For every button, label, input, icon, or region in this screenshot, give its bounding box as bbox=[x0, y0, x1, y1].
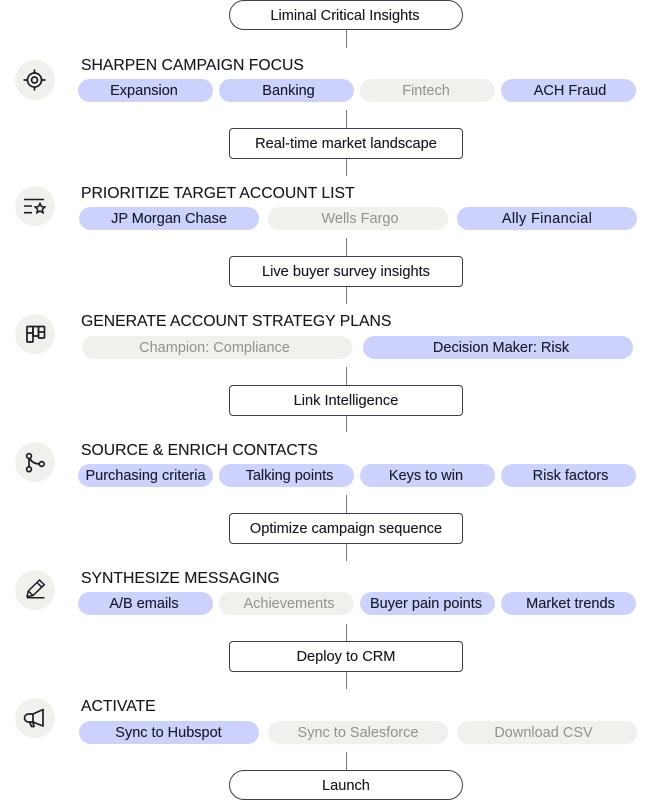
step: Deploy to CRM: Deploy to CRM bbox=[297, 649, 395, 665]
step: Live buyer survey insights bbox=[229, 256, 463, 287]
pill: Decision Maker: Risk: Decision Maker: Risk bbox=[433, 340, 569, 356]
pill: Expansion bbox=[78, 79, 213, 102]
heading: Generate Account Strategy Plans: GENERATE ACCOUNT STRATEGY PLANS bbox=[81, 313, 391, 330]
pill: Keys to win: Keys to win bbox=[389, 468, 463, 484]
pill: Risk factors: Risk factors bbox=[533, 468, 608, 484]
icon: pencil bbox=[15, 570, 55, 610]
pill: ACH Fraud: ACH Fraud bbox=[534, 83, 606, 99]
pill: Keys to win bbox=[360, 464, 495, 487]
pill: Fintech: Fintech bbox=[402, 83, 450, 99]
pill: Buyer pain points bbox=[360, 592, 495, 615]
end node: Launch bbox=[229, 770, 463, 800]
pill: Ally Financial: Ally Financial bbox=[502, 211, 592, 227]
pill: Purchasing criteria bbox=[78, 464, 213, 487]
pill: JP Morgan Chase bbox=[79, 207, 259, 230]
pill: Sync to Hubspot: Sync to Hubspot bbox=[115, 725, 222, 741]
pill: Download CSV: Download CSV bbox=[494, 725, 593, 741]
start node: Liminal Critical Insights bbox=[229, 0, 463, 30]
pill: JP Morgan Chase: JP Morgan Chase bbox=[111, 211, 227, 227]
pill: Market trends: Market trends bbox=[526, 596, 615, 612]
pill: Sync to Hubspot bbox=[79, 721, 259, 744]
icon: megaphone bbox=[15, 698, 55, 738]
heading: Synthesize Messaging: SYNTHESIZE MESSAGING bbox=[81, 570, 280, 587]
icon: branching nodes bbox=[15, 442, 55, 482]
pill: Achievements bbox=[219, 592, 354, 615]
step: Real-time market landscape bbox=[229, 128, 463, 159]
pill: Banking bbox=[219, 79, 354, 102]
step: Live buyer survey insights: Live buyer survey insights bbox=[262, 264, 430, 280]
heading: Prioritize Target Account List: PRIORITIZE TARGET ACCOUNT LIST bbox=[81, 185, 355, 202]
heading: Sharpen Campaign Focus: SHARPEN CAMPAIGN FOCUS bbox=[81, 57, 304, 74]
pill: Decision Maker: Risk bbox=[363, 336, 633, 359]
heading: Activate: ACTIVATE bbox=[81, 698, 156, 715]
step: Link Intelligence bbox=[229, 385, 463, 416]
pill: Banking: Banking bbox=[262, 83, 315, 99]
pill: Champion: Compliance: Champion: Compliance bbox=[139, 340, 290, 356]
pill: Wells Fargo bbox=[268, 207, 448, 230]
pill: Purchasing criteria: Purchasing criteria bbox=[85, 468, 206, 484]
step: Deploy to CRM bbox=[229, 641, 463, 672]
pill: ACH Fraud bbox=[501, 79, 636, 102]
icon: target bbox=[15, 60, 55, 100]
icon: board layout bbox=[15, 314, 55, 354]
pill: Download CSV bbox=[457, 721, 637, 744]
end node: Launch: Launch bbox=[322, 778, 370, 794]
pill: A/B emails: A/B emails bbox=[109, 596, 179, 612]
start node: Liminal Critical Insights: Liminal Critical Insights bbox=[270, 8, 420, 24]
heading: Source & Enrich Contacts: SOURCE & ENRICH CONTACTS bbox=[81, 442, 318, 459]
pill: Expansion: Expansion bbox=[110, 83, 178, 99]
pill: Sync to Salesforce bbox=[268, 721, 448, 744]
pill: Ally Financial bbox=[457, 207, 637, 230]
pill: Risk factors bbox=[501, 464, 636, 487]
pill: Wells Fargo: Wells Fargo bbox=[321, 211, 399, 227]
step: Link Intelligence: Link Intelligence bbox=[294, 393, 398, 409]
pill: Market trends bbox=[501, 592, 636, 615]
pill: Talking points bbox=[219, 464, 354, 487]
pill: A/B emails bbox=[78, 592, 213, 615]
pill: Champion: Compliance bbox=[82, 336, 352, 359]
pill: Achievements: Achievements bbox=[243, 596, 335, 612]
pill: Buyer pain points: Buyer pain points bbox=[370, 596, 482, 612]
step: Real-time market landscape: Real-time market landscape bbox=[255, 136, 437, 152]
pill: Fintech bbox=[360, 79, 495, 102]
icon: starred list bbox=[15, 186, 55, 226]
step: Optimize campaign sequence: Optimize campaign sequence bbox=[250, 521, 442, 537]
pill: Talking points: Talking points bbox=[246, 468, 333, 484]
step: Optimize campaign sequence bbox=[229, 513, 463, 544]
pill: Sync to Salesforce: Sync to Salesforce bbox=[298, 725, 418, 741]
